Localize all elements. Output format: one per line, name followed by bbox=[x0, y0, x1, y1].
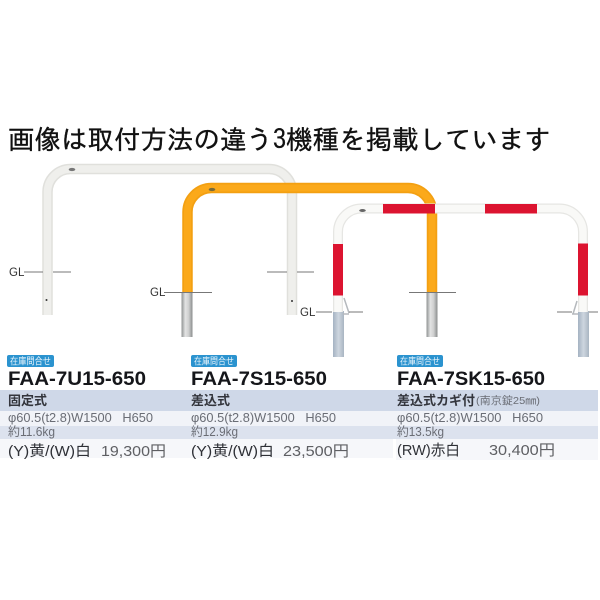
ground line: white bollard left bbox=[24, 271, 71, 273]
ground line: red bollard bbox=[316, 311, 598, 313]
bollard: orange FAA-7S15-650 bbox=[164, 188, 456, 337]
label: GL white: GL bbox=[9, 267, 25, 279]
colour: (Y)黄/(W)白 bbox=[8, 443, 91, 460]
label: GL red: GL bbox=[300, 307, 316, 319]
install type: 固定式 bbox=[8, 393, 47, 408]
bollard: red and white FAA-7SK15-650 bbox=[316, 204, 598, 357]
model name: FAA-7SK15-650 bbox=[397, 368, 545, 390]
stock badge: 在庫問合せ bbox=[400, 356, 440, 368]
product: FAA-7SK15-650 bbox=[397, 355, 555, 459]
bollard: white FAA-7U15-650 bbox=[24, 168, 293, 315]
product: FAA-7U15-650 bbox=[7, 355, 166, 460]
ground line: white bollard right bbox=[267, 271, 314, 273]
install type: 差込式 bbox=[191, 393, 230, 408]
stock badge: 在庫問合せ bbox=[194, 356, 234, 368]
specifications: φ60.5(t2.8)W1500 H650 bbox=[397, 411, 543, 425]
model name: FAA-7S15-650 bbox=[191, 368, 327, 390]
specifications: φ60.5(t2.8)W1500 H650 bbox=[191, 411, 336, 425]
product: FAA-7S15-650 bbox=[191, 355, 349, 460]
weight: 約13.5kg bbox=[397, 424, 444, 439]
label: GL orange: GL bbox=[150, 287, 166, 299]
colour: (RW)赤白 bbox=[397, 442, 460, 459]
price: 30,400円 bbox=[489, 442, 555, 459]
stock badge: 在庫問合せ bbox=[10, 356, 51, 368]
weight: 約11.6kg bbox=[8, 424, 55, 439]
padlock note: (南京錠25㎜) bbox=[476, 394, 540, 407]
weight: 約12.9kg bbox=[191, 424, 238, 439]
specifications: φ60.5(t2.8)W1500 H650 bbox=[8, 411, 153, 425]
price: 23,500円 bbox=[283, 443, 349, 460]
ground line: orange bollard bbox=[164, 292, 456, 294]
price: 19,300円 bbox=[101, 443, 166, 460]
colour: (Y)黄/(W)白 bbox=[191, 443, 274, 460]
model name: FAA-7U15-650 bbox=[8, 368, 146, 390]
table bands bbox=[0, 390, 598, 460]
heading: 画像は取付方法の違う3機種を掲載しています bbox=[8, 126, 551, 153]
install type: 差込式カギ付 bbox=[397, 393, 475, 408]
